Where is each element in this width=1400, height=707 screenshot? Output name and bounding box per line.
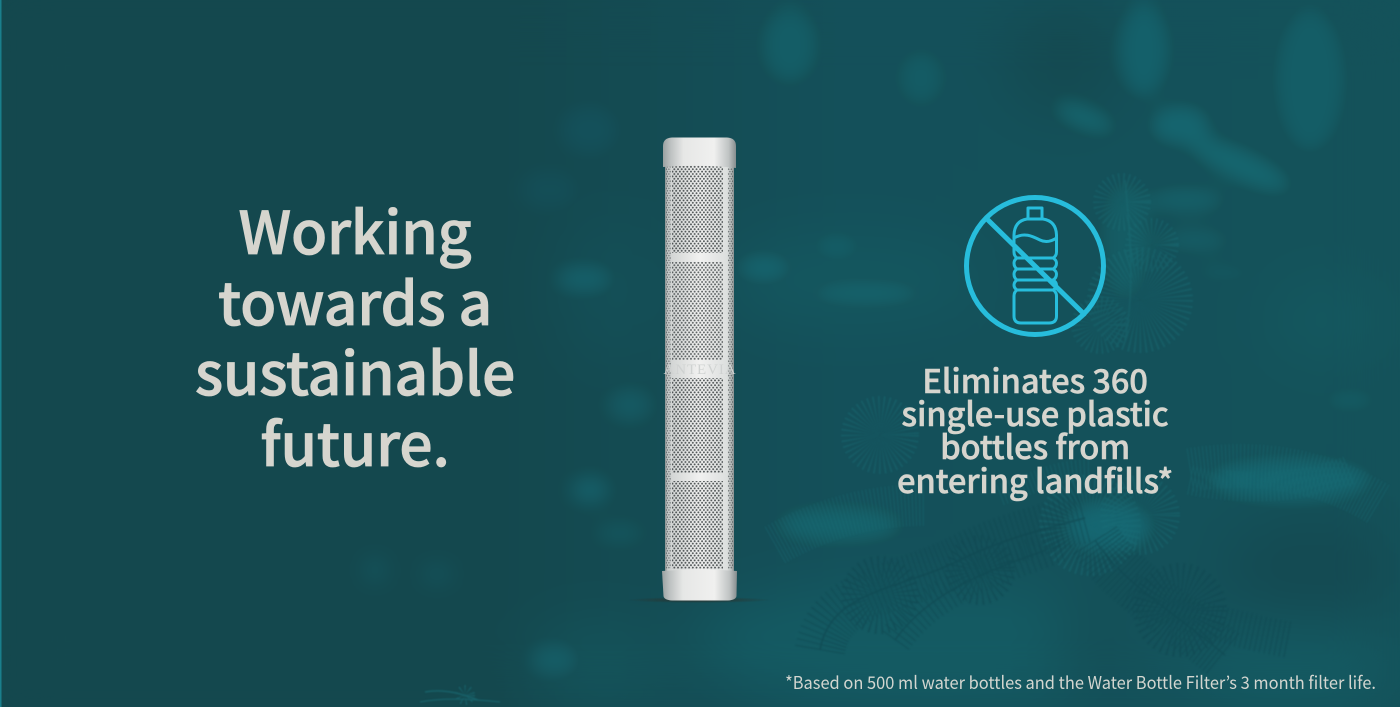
claim text: Eliminates 360 bbox=[922, 356, 1148, 402]
footnote: *Based on 500 ml water bottles and the Water Bottle Filter’s 3 month filter life. bbox=[785, 670, 1376, 695]
icon: no plastic bottle bbox=[964, 195, 1106, 337]
bottom cap bbox=[662, 570, 737, 600]
claim text: single-use plastic bbox=[901, 389, 1169, 436]
claim text bbox=[897, 356, 1173, 503]
pine branches bbox=[420, 180, 1380, 702]
heading: Working bbox=[239, 186, 471, 271]
shadow bbox=[627, 597, 771, 603]
product: water bottle filter bbox=[642, 138, 760, 602]
heading: future. bbox=[260, 398, 450, 482]
left edge line bbox=[0, 0, 2, 707]
heading: sustainable bbox=[195, 327, 515, 412]
perforated panels bbox=[666, 165, 733, 569]
brand band: ANTEVIA bbox=[664, 362, 736, 378]
heading: towards a bbox=[218, 256, 492, 342]
claim text: entering landfills* bbox=[897, 456, 1173, 503]
top cap bbox=[663, 138, 736, 168]
tube body bbox=[665, 165, 734, 572]
claim text: bottles from bbox=[940, 422, 1130, 469]
heading bbox=[195, 186, 515, 482]
